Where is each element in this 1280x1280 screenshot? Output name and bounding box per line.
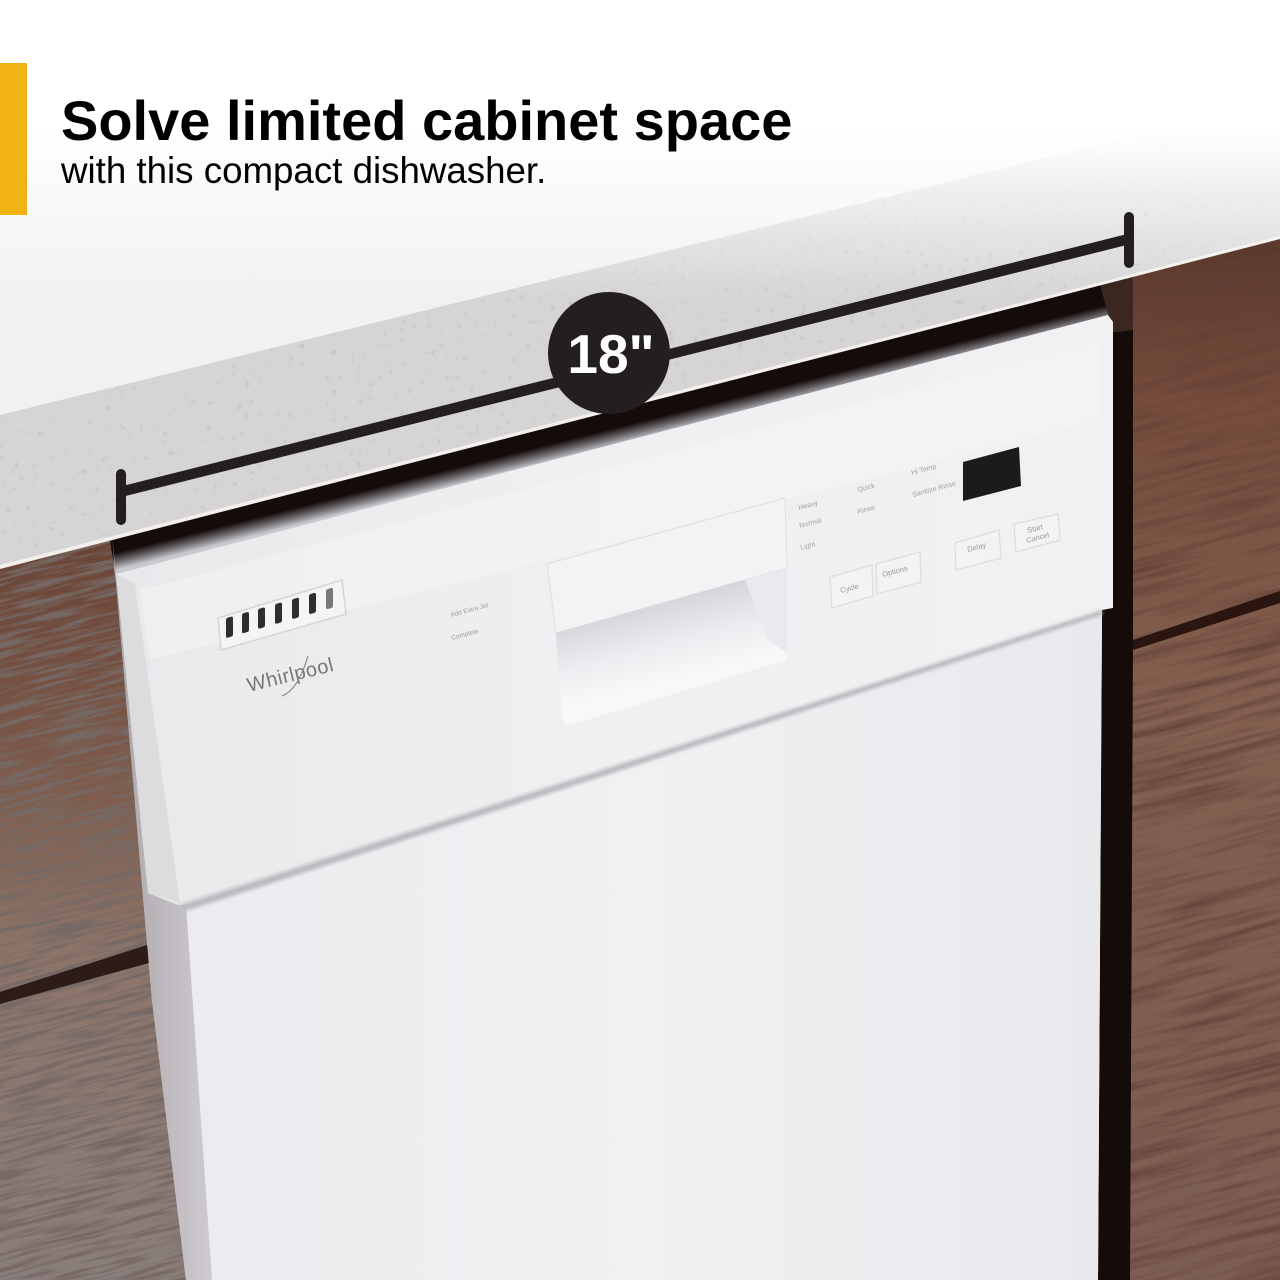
digital display xyxy=(963,447,1021,501)
wash option labels: Light xyxy=(800,541,816,552)
button labels: Cycle xyxy=(839,581,860,595)
title: Solve limited cabinet space xyxy=(61,89,792,152)
wash option labels: Rinse xyxy=(857,505,876,516)
shadow gap around dishwasher xyxy=(110,272,1133,1280)
counter top surface xyxy=(0,100,1280,415)
wash option labels: Quick xyxy=(857,482,876,494)
Whirlpool logo: Whirlpool xyxy=(245,654,336,697)
vent slots xyxy=(218,580,346,650)
button labels: Start xyxy=(1026,522,1045,535)
button labels: Cancel xyxy=(1025,530,1050,545)
control buttons xyxy=(830,514,1060,608)
control panel xyxy=(116,315,1113,911)
countertop front edge xyxy=(0,157,1280,569)
counter fade to white xyxy=(0,0,1280,567)
wash option labels xyxy=(798,464,957,552)
cycle status labels: Add Extra Jet xyxy=(450,602,489,619)
left wood cabinet xyxy=(0,535,186,1280)
wash option labels: Sanitize Rinse xyxy=(912,481,957,499)
dishwasher door xyxy=(186,610,1102,1280)
wash option labels: Normal xyxy=(799,517,823,530)
cycle status labels: Complete xyxy=(451,628,480,642)
subtitle: with this compact dishwasher. xyxy=(60,150,546,191)
handle xyxy=(547,498,787,726)
dimension line: 18 inches xyxy=(120,217,1129,520)
dimension line: 18 inches: 18" xyxy=(567,323,655,385)
gray dishwasher side strip xyxy=(112,535,214,1280)
accent bar xyxy=(0,63,27,215)
button labels: Delay xyxy=(966,540,987,554)
button labels: Options xyxy=(881,563,909,579)
wash option labels: Heavy xyxy=(798,500,819,512)
wash option labels: Hi Temp xyxy=(911,464,937,477)
cycle status labels xyxy=(450,602,489,642)
right wood cabinet xyxy=(1128,232,1280,1280)
button labels xyxy=(839,522,1050,595)
